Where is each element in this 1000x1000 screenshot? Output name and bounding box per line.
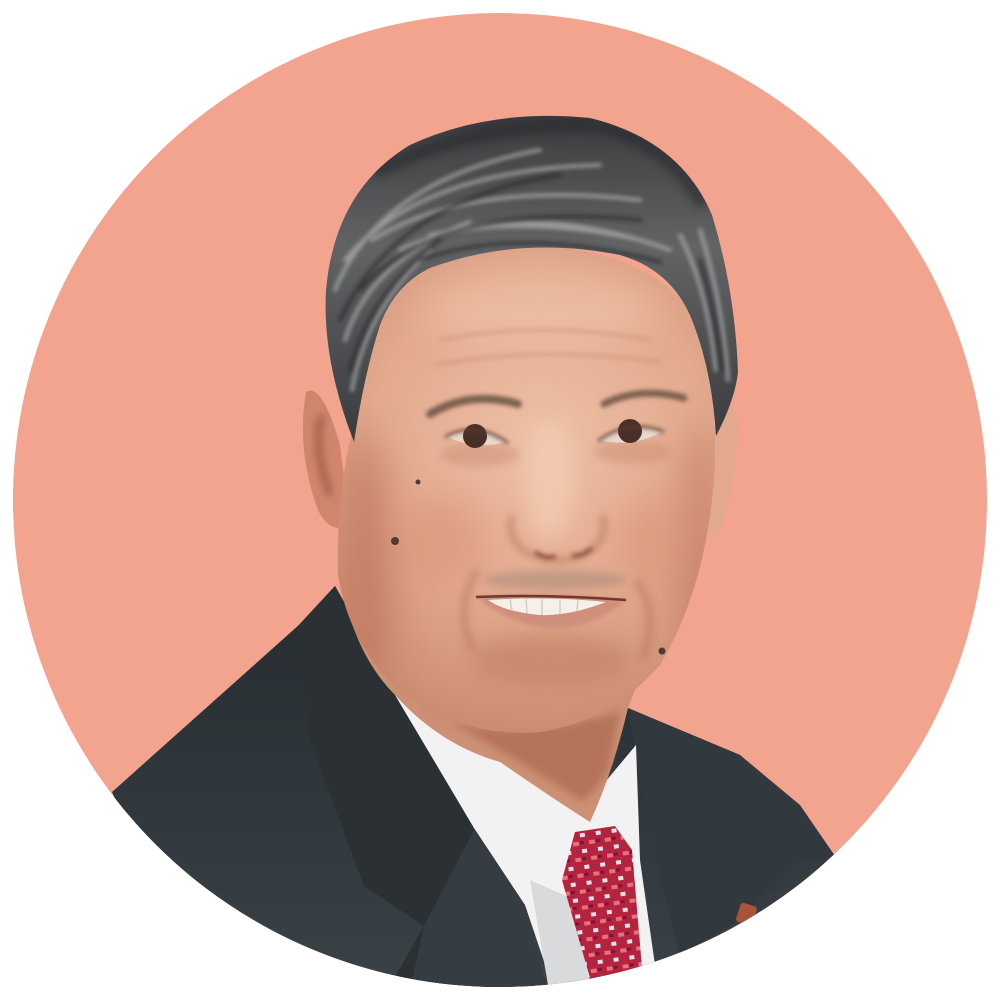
face shading xyxy=(335,275,722,690)
mouth xyxy=(476,594,626,628)
neck xyxy=(352,626,635,822)
hair xyxy=(326,116,738,442)
lapel pin xyxy=(736,902,757,923)
face xyxy=(338,245,715,733)
nose xyxy=(511,515,604,561)
ears xyxy=(303,391,738,538)
suit jacket xyxy=(112,586,835,990)
necktie xyxy=(562,826,642,978)
figure xyxy=(112,116,835,990)
eyebrows xyxy=(430,393,684,414)
moles xyxy=(391,480,666,654)
shirt collar xyxy=(395,695,655,985)
neck shadow xyxy=(457,712,621,801)
eyes xyxy=(445,419,664,448)
